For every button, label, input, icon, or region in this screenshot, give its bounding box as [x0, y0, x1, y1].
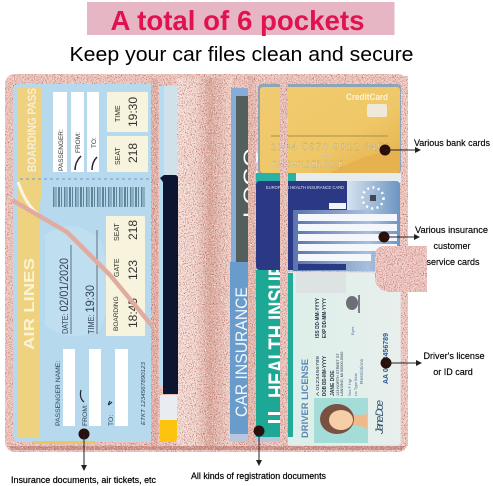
ticket number: ETKT 1234567890123 [141, 361, 147, 425]
gate box: BOARDING [113, 296, 120, 331]
boarding pass stripe: BOARDING PASS [27, 88, 39, 172]
license fields: JANE DOE [330, 370, 336, 396]
wallet glitter body [5, 74, 408, 452]
passenger fields: FROM: [82, 404, 89, 426]
credit card: CARDHOLDER NAME [272, 160, 343, 169]
seat box: 218 [126, 143, 140, 163]
boarding pass name fields: TO: [91, 137, 98, 148]
flight info: DATE: 02/01/2020 [57, 258, 71, 334]
boarding pass stripe [18, 88, 42, 200]
gate box: 123 [126, 260, 140, 280]
inner left sleeve [159, 86, 178, 442]
air lines stripe [17, 182, 95, 444]
boarding pass name fields: PASSENGER: [58, 129, 65, 171]
callout: bank cards [380, 138, 490, 156]
license fields: Restrictions [359, 359, 364, 384]
passenger fields [55, 349, 128, 426]
pocket strips [248, 76, 256, 448]
callout: bank cards: Various bank cards [414, 138, 490, 148]
chip [367, 104, 387, 117]
gate box [106, 216, 145, 336]
gate box: GATE [114, 258, 121, 277]
barcode [53, 187, 146, 207]
passenger fields: PASSENGER NAME: [55, 361, 62, 426]
callout: insurance cards: customer [433, 241, 471, 251]
flight info: TIME: 19:30 [83, 285, 97, 334]
license fields [315, 297, 364, 396]
callout: license: or ID card [433, 367, 473, 377]
EU star circle [362, 188, 384, 208]
left pocket: tickets [13, 84, 155, 444]
gate box: SEAT [114, 223, 121, 241]
callout: insurance cards: service cards [426, 257, 480, 267]
right edge and bottom trim [8, 76, 408, 450]
driver's license: DRIVER LICENSE [300, 359, 311, 438]
passenger fields: TO: [108, 415, 115, 426]
callout: registration documents [191, 426, 326, 481]
license photo [314, 398, 368, 443]
license fields: ISS DD-MM-YYYY [315, 297, 321, 338]
callout: license: Driver's license [424, 351, 484, 361]
car insurance label: CAR INSURANCE [233, 287, 251, 417]
slanted pocket strap [12, 200, 153, 327]
title banner: A total of 6 pockets [110, 5, 364, 36]
callout: license [380, 351, 484, 377]
clasp [375, 246, 427, 292]
air lines stripe: AIR LINES [21, 258, 38, 350]
signature: Jane Doe [374, 400, 386, 435]
license number: AA 0123456789 [383, 333, 390, 384]
gate box: 218 [126, 220, 140, 240]
license fields: Sex F Hgt [348, 378, 352, 396]
time box [107, 92, 148, 132]
flight info [57, 230, 97, 334]
time box: TIME [115, 105, 122, 122]
seat box [107, 136, 148, 172]
world map tint [45, 226, 109, 336]
gate box: 18:45 [126, 298, 140, 328]
callout: insurance cards [378, 225, 488, 267]
credit card: 1234 5678 9012 3456 [271, 142, 390, 153]
license fields: 123 NORTH STREET ST [336, 353, 340, 396]
callout: registration documents: All kinds of registration documents [191, 471, 326, 481]
license fields: LANSING, MI 00000-0000 [340, 352, 344, 396]
callout: insurance documents: Insurance documents, air tickets, etc [11, 475, 156, 485]
seat box: SEAT [115, 147, 122, 165]
credit card [258, 84, 401, 174]
left pocket stitching [151, 78, 158, 448]
boarding pass name fields: FROM: [75, 132, 82, 153]
license fields: EXP DD-MM-YYYY [322, 297, 328, 338]
health insurance card [256, 270, 280, 442]
license fields: Eyes [351, 326, 355, 335]
license fields: DOB DD-MM-YYYY [322, 355, 328, 396]
credit card: 00/00 [319, 154, 332, 160]
callout: insurance documents [11, 428, 156, 485]
time box: 19:30 [126, 97, 140, 127]
license fields: Lic Type Blue [354, 373, 358, 396]
credit card: CreditCard [346, 92, 388, 102]
logo text: LOGO [240, 148, 263, 218]
tear line [20, 178, 155, 180]
insurance card: EUROPEAN HEALTH INSURANCE CARD [266, 185, 344, 191]
driver's license [285, 272, 401, 446]
form rows [298, 214, 397, 261]
wallet [5, 74, 427, 452]
registration document card [230, 88, 263, 442]
health insurance label: HEALTH INSUR [264, 263, 291, 398]
center spine [177, 78, 232, 448]
ghost photo [346, 295, 359, 313]
callout: insurance cards: Various insurance [415, 225, 488, 235]
insurance card [256, 173, 401, 271]
subtitle: Keep your car files clean and secure [70, 44, 414, 66]
license fields: A 0123456789 [315, 356, 321, 396]
boarding pass name fields [53, 92, 99, 172]
